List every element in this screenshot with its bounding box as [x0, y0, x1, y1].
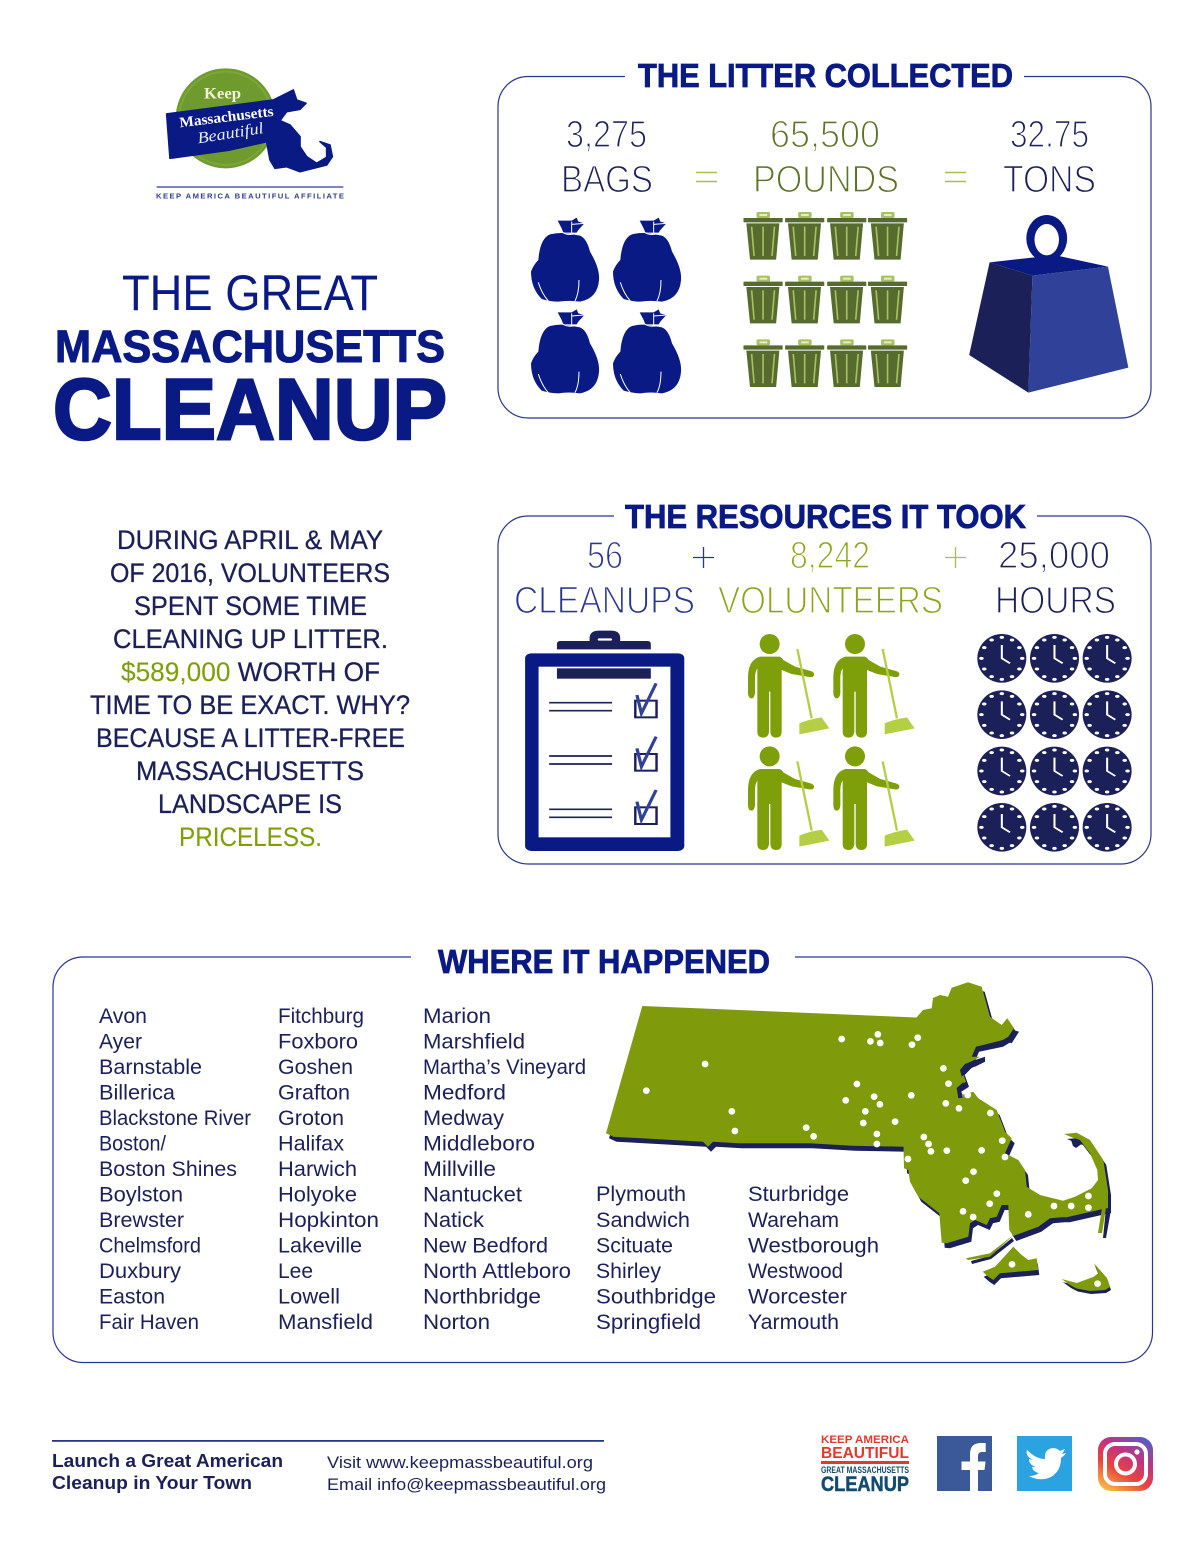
- main title: MASSACHUSETTS: [55, 321, 445, 372]
- list: towns column 3: Martha’s Vineyard: [423, 1056, 586, 1079]
- list: towns column 1: Duxbury: [99, 1260, 182, 1283]
- list: towns column 3: Northbridge: [423, 1286, 541, 1308]
- list: towns column 1: Barnstable: [99, 1056, 202, 1079]
- icon: clipboard checklist: [525, 631, 684, 851]
- heading: the litter collected: THE LITTER COLLECTED: [638, 57, 1013, 94]
- logo: Keep Massachusetts Beautiful: Massachusetts: [179, 104, 275, 131]
- list: towns column 3: North Attleboro: [423, 1260, 571, 1283]
- list: towns column 3: Marion: [423, 1005, 491, 1028]
- logo: Keep Massachusetts Beautiful: Keep: [204, 85, 241, 102]
- main title: CLEANUP: [53, 362, 447, 458]
- logo: Keep America Beautiful Great Massachusetts Cleanup: CLEANUP: [821, 1473, 909, 1496]
- panel: the litter collected: [498, 57, 1151, 418]
- main title: THE GREAT: [122, 265, 378, 321]
- stat: volunteers: 8,242: [790, 535, 870, 577]
- list: towns column 2: Lakeville: [278, 1234, 362, 1258]
- list: towns column 5: Wareham: [748, 1209, 839, 1232]
- footer call to action: Launch a Great American: [52, 1451, 283, 1471]
- map: Massachusetts with cleanup locations: [606, 982, 1111, 1294]
- logo: Keep America Beautiful Great Massachusetts Cleanup: KEEP AMERICA: [821, 1434, 909, 1446]
- main title: [53, 265, 447, 458]
- list: towns column 3: Marshfield: [423, 1030, 525, 1054]
- list: towns column 3: Middleboro: [423, 1132, 535, 1156]
- footer call to action: [52, 1440, 604, 1493]
- list: towns column 1: Easton: [99, 1286, 165, 1308]
- list: towns column 2: Fitchburg: [278, 1005, 364, 1028]
- stat: tons: 32.75: [1010, 114, 1089, 156]
- list: towns column 4: Southbridge: [596, 1286, 716, 1308]
- icons: clocks: [977, 634, 1132, 852]
- stat: cleanups: CLEANUPS: [514, 580, 695, 622]
- list: towns column 2: Hopkinton: [278, 1209, 379, 1232]
- list: towns column 2: Mansfield: [278, 1311, 373, 1334]
- list: towns column 3: Norton: [423, 1311, 490, 1334]
- list: towns column 5: Westwood: [748, 1260, 843, 1283]
- plus sign: [693, 547, 714, 568]
- list: towns column 2: Holyoke: [278, 1184, 357, 1206]
- intro paragraph: MASSACHUSETTS: [136, 756, 364, 786]
- intro paragraph: $589,000 WORTH OF: [121, 657, 380, 687]
- stat: volunteers: [718, 535, 943, 622]
- list: towns column 1: Brewster: [99, 1209, 184, 1232]
- stat: bags: [561, 114, 653, 201]
- heading: where it happened: WHERE IT HAPPENED: [438, 943, 770, 980]
- intro paragraph: BECAUSE A LITTER-FREE: [96, 723, 405, 753]
- stat: hours: HOURS: [995, 580, 1116, 622]
- list: towns column 1: Ayer: [99, 1030, 142, 1054]
- list: towns column 1: Boston Shines: [99, 1158, 237, 1181]
- logo: Keep Massachusetts Beautiful: KEEP AMERICA BEAUTIFUL AFFILIATE: [156, 191, 344, 200]
- list: towns column 3: Medway: [423, 1107, 505, 1130]
- list: towns column 5: Sturbridge: [748, 1183, 849, 1206]
- icon: facebook: [937, 1436, 992, 1491]
- equals sign: [696, 172, 717, 182]
- list: towns column 4: Plymouth: [596, 1183, 686, 1206]
- list: towns column 2: Foxboro: [278, 1030, 358, 1054]
- list: towns column 2: Lowell: [278, 1286, 340, 1308]
- logo: Keep Massachusetts Beautiful: Beautiful: [196, 120, 265, 147]
- intro paragraph: LANDSCAPE IS: [158, 789, 342, 819]
- list: towns column 4: Shirley: [596, 1260, 661, 1283]
- list: towns column 3: Nantucket: [423, 1184, 522, 1206]
- logo: Keep Massachusetts Beautiful: [156, 68, 344, 200]
- stat: hours: [995, 535, 1116, 622]
- stat: bags: 3,275: [566, 114, 647, 156]
- stat: volunteers: VOLUNTEERS: [718, 580, 943, 622]
- stat: tons: [1003, 114, 1096, 201]
- footer call to action: Cleanup in Your Town: [52, 1473, 252, 1493]
- list: towns column 3: Natick: [423, 1209, 485, 1232]
- list: towns column 5: [748, 1183, 879, 1334]
- list: towns column 1: Blackstone River: [99, 1107, 251, 1130]
- plus sign: [945, 547, 966, 568]
- stat: cleanups: 56: [587, 535, 623, 577]
- list: towns column 3: New Bedford: [423, 1234, 548, 1258]
- intro paragraph: PRICELESS.: [179, 822, 322, 852]
- panel: the resources it took: [498, 498, 1151, 864]
- stat: pounds: POUNDS: [753, 159, 899, 201]
- logo: Keep America Beautiful Great Massachusetts Cleanup: GREAT MASSACHUSETTS: [821, 1465, 909, 1475]
- intro paragraph: CLEANING UP LITTER.: [113, 624, 388, 654]
- list: towns column 2: Halifax: [278, 1132, 344, 1156]
- icon: instagram: [1098, 1437, 1153, 1491]
- list: towns column 1: [99, 1005, 251, 1334]
- list: towns column 4: Sandwich: [596, 1209, 690, 1232]
- logo: Keep America Beautiful Great Massachusetts Cleanup: [821, 1434, 909, 1496]
- icon: weight: [969, 215, 1128, 393]
- logo: Keep America Beautiful Great Massachusetts Cleanup: BEAUTIFUL: [821, 1445, 909, 1462]
- equals sign: [945, 172, 966, 182]
- list: towns column 4: Scituate: [596, 1234, 673, 1258]
- intro paragraph: SPENT SOME TIME: [134, 591, 367, 621]
- icons: trash bags: [531, 218, 681, 393]
- list: towns column 3: Medford: [423, 1082, 506, 1104]
- stat: cleanups: [514, 535, 695, 622]
- icon: twitter: [1017, 1436, 1072, 1491]
- list: towns column 4: Springfield: [596, 1311, 701, 1334]
- footer contact details: Visit www.keepmassbeautiful.org: [327, 1453, 593, 1472]
- list: towns column 2: Groton: [278, 1107, 344, 1130]
- list: towns column 1: Billerica: [99, 1082, 175, 1104]
- heading: the resources it took: THE RESOURCES IT TOOK: [625, 498, 1026, 535]
- list: towns column 2: Harwich: [278, 1158, 357, 1181]
- stat: bags: BAGS: [561, 159, 653, 201]
- stat: hours: 25,000: [998, 535, 1110, 577]
- list: towns column 2: [278, 1005, 379, 1334]
- footer contact details: [327, 1453, 606, 1494]
- intro paragraph: DURING APRIL & MAY: [117, 525, 383, 555]
- list: towns column 1: Avon: [99, 1005, 147, 1028]
- intro paragraph: [90, 525, 410, 852]
- list: towns column 5: Westborough: [748, 1234, 879, 1258]
- list: towns column 2: Goshen: [278, 1056, 353, 1079]
- list: towns column 1: Boylston: [99, 1184, 183, 1206]
- stat: pounds: [753, 114, 899, 201]
- icons: trash cans: [743, 212, 907, 387]
- list: towns column 1: Boston/: [99, 1132, 166, 1156]
- panel: where it happened: [53, 943, 1152, 1362]
- list: towns column 1: Chelmsford: [99, 1234, 201, 1258]
- list: towns column 3: [423, 1005, 586, 1334]
- intro paragraph: TIME TO BE EXACT. WHY?: [90, 690, 410, 720]
- list: towns column 4: [596, 1183, 716, 1334]
- icons: volunteers with brooms: [748, 634, 915, 850]
- list: towns column 3: Millville: [423, 1158, 496, 1181]
- list: towns column 5: Worcester: [748, 1286, 847, 1308]
- list: towns column 5: Yarmouth: [748, 1311, 839, 1334]
- stat: tons: TONS: [1003, 159, 1096, 201]
- stat: pounds: 65,500: [770, 114, 880, 156]
- list: towns column 2: Lee: [278, 1260, 313, 1283]
- list: towns column 1: Fair Haven: [99, 1311, 199, 1334]
- footer contact details: Email info@keepmassbeautiful.org: [327, 1475, 606, 1494]
- intro paragraph: OF 2016, VOLUNTEERS: [110, 558, 390, 588]
- list: towns column 2: Grafton: [278, 1082, 350, 1104]
